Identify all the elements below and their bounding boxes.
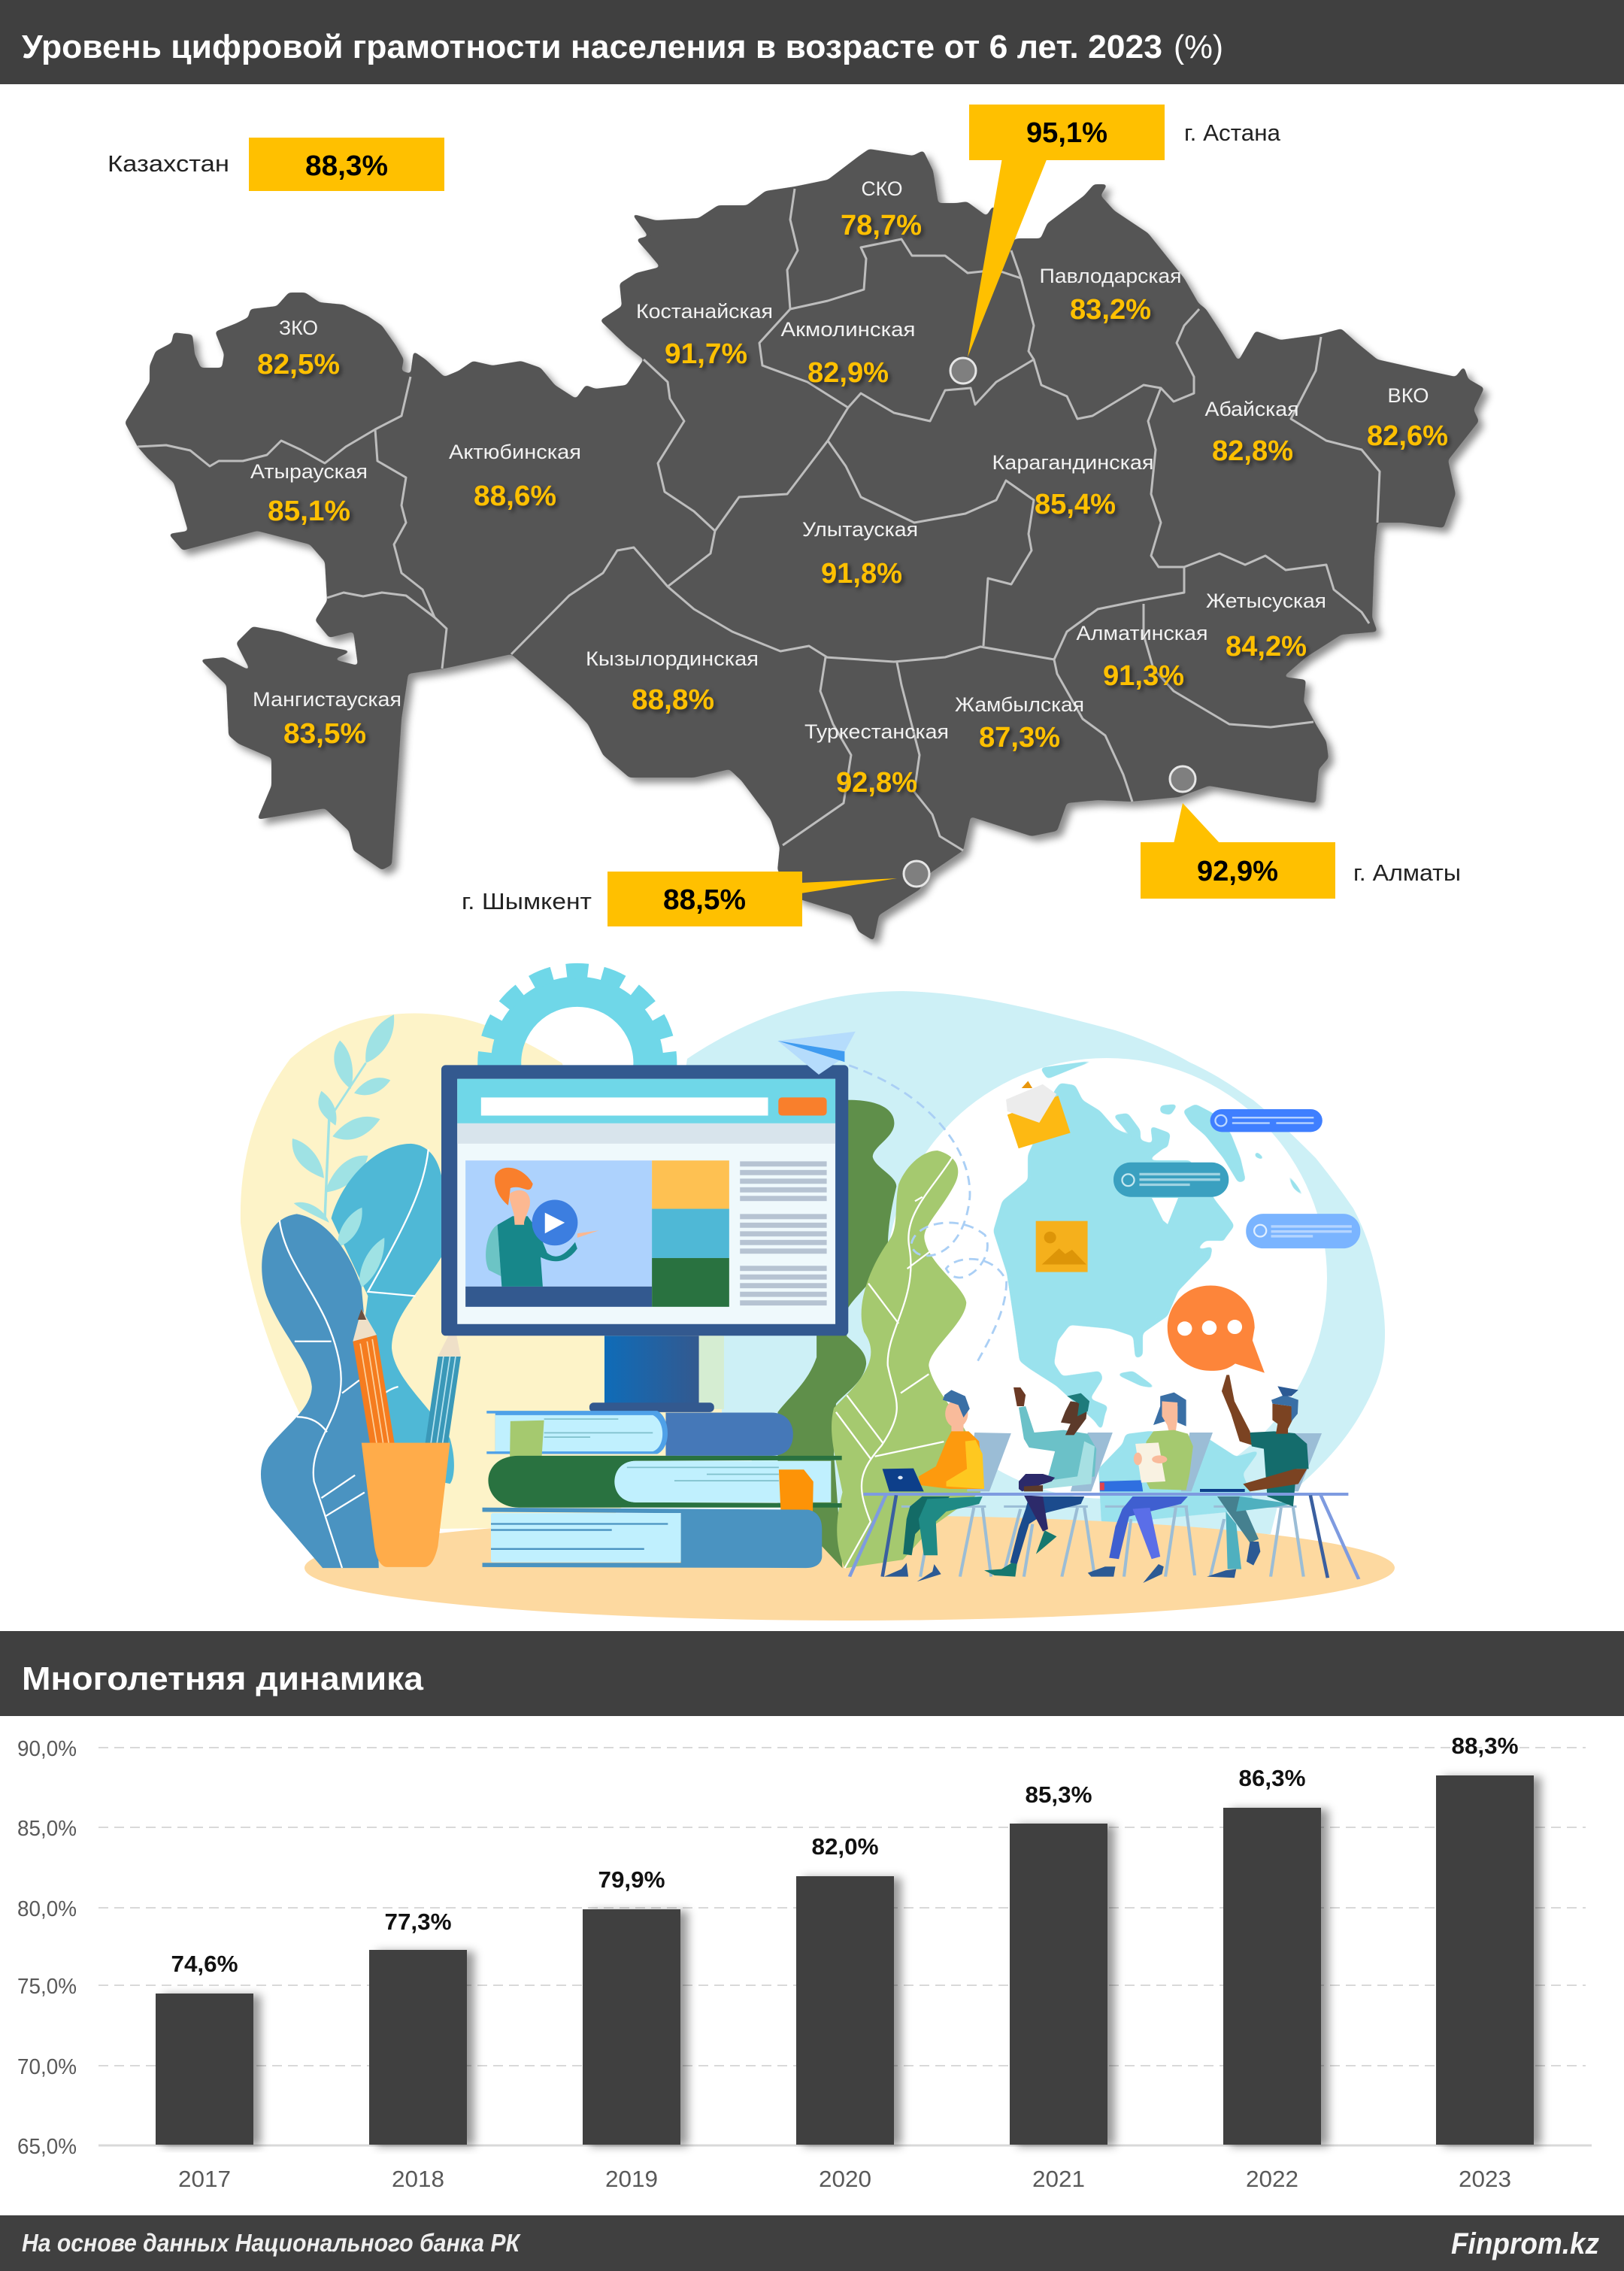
region labels and values: Улытауская	[802, 518, 918, 541]
map outline	[125, 149, 1484, 941]
bar 2021: 2021	[1032, 2166, 1085, 2192]
bottom book	[483, 1508, 822, 1568]
callout: Kazakhstan	[108, 138, 444, 191]
region labels and values: Карагандинская	[992, 451, 1153, 474]
region labels and values: 82,5%	[257, 349, 340, 381]
section heading: dynamics	[0, 1631, 1624, 1716]
bar 2017: 2017	[178, 2166, 231, 2192]
top book	[665, 1412, 793, 1456]
region labels and values: Павлодарская	[1039, 265, 1182, 287]
icon: picture	[1036, 1221, 1088, 1272]
pencil blue	[425, 1357, 461, 1445]
paper plane	[777, 1032, 1007, 1363]
icon: envelope	[1022, 1081, 1032, 1088]
region borders	[138, 189, 1380, 850]
bar 2023: 88,3%	[1451, 1733, 1519, 1759]
bar 2022: 2022	[1246, 2166, 1298, 2192]
stack of books	[483, 1411, 842, 1568]
bar 2017	[156, 1951, 253, 2192]
map of Kazakhstan	[125, 149, 1484, 941]
student 1	[903, 1496, 950, 1555]
region labels and values: 82,8%	[1212, 435, 1293, 467]
brand: Finprom.kz	[1451, 2227, 1599, 2260]
callout: Almaty: 92,9%	[1197, 856, 1278, 887]
chat bubble teal	[1113, 1163, 1229, 1197]
continents	[993, 1057, 1310, 1524]
bar 2019: 2019	[605, 2166, 658, 2192]
region labels and values: Алматинская	[1077, 622, 1207, 644]
bar 2018	[369, 1909, 467, 2192]
y axis gridlines and labels: 85,0%	[17, 1817, 77, 1841]
region labels and values: Актюбинская	[449, 441, 581, 463]
region labels and values: 88,8%	[632, 684, 714, 716]
background blob light blue	[677, 991, 1385, 1534]
bar 2019: 79,9%	[598, 1866, 665, 1893]
footer	[0, 2215, 1624, 2271]
callout: Kazakhstan: Казахстан	[108, 150, 229, 177]
chat bubble light blue	[1246, 1214, 1360, 1248]
chat bubble blue	[1210, 1109, 1323, 1132]
y axis gridlines and labels: 90,0%	[17, 1737, 77, 1761]
bar chart	[17, 1733, 1592, 2192]
play button	[532, 1199, 577, 1245]
source note: На основе данных Национального банка РК	[22, 2229, 521, 2257]
title bar: (%)	[1174, 29, 1223, 65]
y axis gridlines and labels: 80,0%	[17, 1897, 77, 1921]
speech bubble orange	[1168, 1286, 1265, 1373]
monitor	[441, 1065, 848, 1412]
region labels and values: Костанайская	[636, 300, 773, 323]
bar 2021: 85,3%	[1026, 1781, 1092, 1808]
region labels and values: 87,3%	[979, 722, 1060, 753]
region labels and values: 92,8%	[836, 767, 917, 799]
title bar	[0, 0, 1624, 84]
back leaf	[332, 1144, 454, 1484]
region labels and values: ВКО	[1388, 384, 1429, 407]
student 2	[1010, 1496, 1084, 1564]
callout: Astana: 95,1%	[1026, 117, 1107, 149]
bar 2022: 86,3%	[1239, 1765, 1305, 1791]
callout: Kazakhstan: 88,3%	[305, 150, 388, 182]
region labels and values: ЗКО	[279, 317, 318, 339]
globe icons	[1006, 1081, 1360, 1373]
region labels and values: 78,7%	[841, 210, 922, 241]
callout: Astana	[950, 105, 1281, 384]
hudson bay notch	[1152, 1198, 1178, 1224]
bar 2020	[796, 1833, 894, 2192]
bar 2018: 77,3%	[385, 1909, 451, 1935]
y axis gridlines and labels	[17, 1737, 1592, 2159]
student 3	[1100, 1480, 1143, 1491]
region labels and values: 84,2%	[1226, 631, 1307, 663]
y axis gridlines and labels: 75,0%	[17, 1975, 77, 1999]
group of students at table	[850, 1375, 1359, 1583]
region labels and values: 82,6%	[1367, 420, 1448, 452]
callout: Shymkent: г. Шымкент	[462, 888, 592, 914]
y axis gridlines and labels: 65,0%	[17, 2135, 77, 2159]
callout: Almaty: г. Алматы	[1353, 860, 1461, 886]
region labels and values: 91,8%	[821, 558, 902, 590]
pencil orange	[353, 1335, 395, 1445]
region labels and values: 85,1%	[268, 496, 350, 527]
title bar: Уровень цифровой грамотности населения в возрасте от 6 лет. 2023	[22, 29, 1162, 65]
region labels and values: Туркестанская	[804, 720, 949, 743]
bar 2017: 74,6%	[171, 1951, 238, 1977]
region labels and values: Атырауская	[250, 460, 368, 483]
callout: Astana: г. Астана	[1184, 120, 1281, 146]
monitor stand	[604, 1336, 699, 1405]
bar 2023	[1436, 1733, 1534, 2192]
bar 2019	[583, 1866, 680, 2192]
callout: Shymkent	[462, 861, 929, 926]
region labels and values: СКО	[862, 177, 902, 200]
y axis gridlines and labels: 70,0%	[17, 2055, 77, 2079]
region labels and values: Жамбылская	[955, 693, 1084, 716]
region labels and values: Кызылординская	[586, 647, 759, 670]
region labels and values: 91,3%	[1103, 660, 1184, 692]
region labels and values	[250, 177, 1448, 799]
region labels and values: Абайская	[1204, 398, 1299, 420]
region labels and values: 83,2%	[1070, 294, 1151, 326]
region labels and values: 91,7%	[665, 338, 747, 370]
illustration: digital education	[241, 971, 1395, 1621]
callout: Shymkent: 88,5%	[663, 884, 746, 916]
middle book	[488, 1456, 842, 1508]
background blob yellow	[241, 1013, 722, 1529]
region labels and values: 82,9%	[807, 357, 889, 389]
chairs	[967, 1433, 1322, 1491]
globe	[886, 1058, 1327, 1499]
gear	[486, 971, 669, 1155]
bar 2021	[1010, 1781, 1107, 2192]
student 4	[1217, 1496, 1259, 1543]
bar 2020: 82,0%	[812, 1833, 878, 1860]
callout: Almaty	[1141, 766, 1461, 899]
left plants, pencils and cup	[261, 1014, 461, 1568]
region labels and values: 83,5%	[283, 718, 366, 750]
bar 2023: 2023	[1459, 2166, 1511, 2192]
ground ellipse	[304, 1515, 1395, 1621]
bar 2022	[1223, 1765, 1321, 2192]
bar 2018: 2018	[392, 2166, 444, 2192]
region labels and values: Мангистауская	[253, 688, 401, 711]
region labels and values: 85,4%	[1035, 489, 1116, 520]
table	[863, 1493, 1348, 1496]
green leaves	[777, 1100, 980, 1568]
bar 2020: 2020	[819, 2166, 871, 2192]
region labels and values: Акмолинская	[780, 318, 916, 341]
front leaf	[261, 1214, 379, 1568]
region labels and values: 88,6%	[474, 481, 556, 512]
cup	[362, 1443, 450, 1567]
section heading: dynamics: Многолетняя динамика	[22, 1660, 424, 1697]
dashed flight path	[849, 1066, 1007, 1363]
region labels and values: Жетысуская	[1206, 590, 1326, 612]
